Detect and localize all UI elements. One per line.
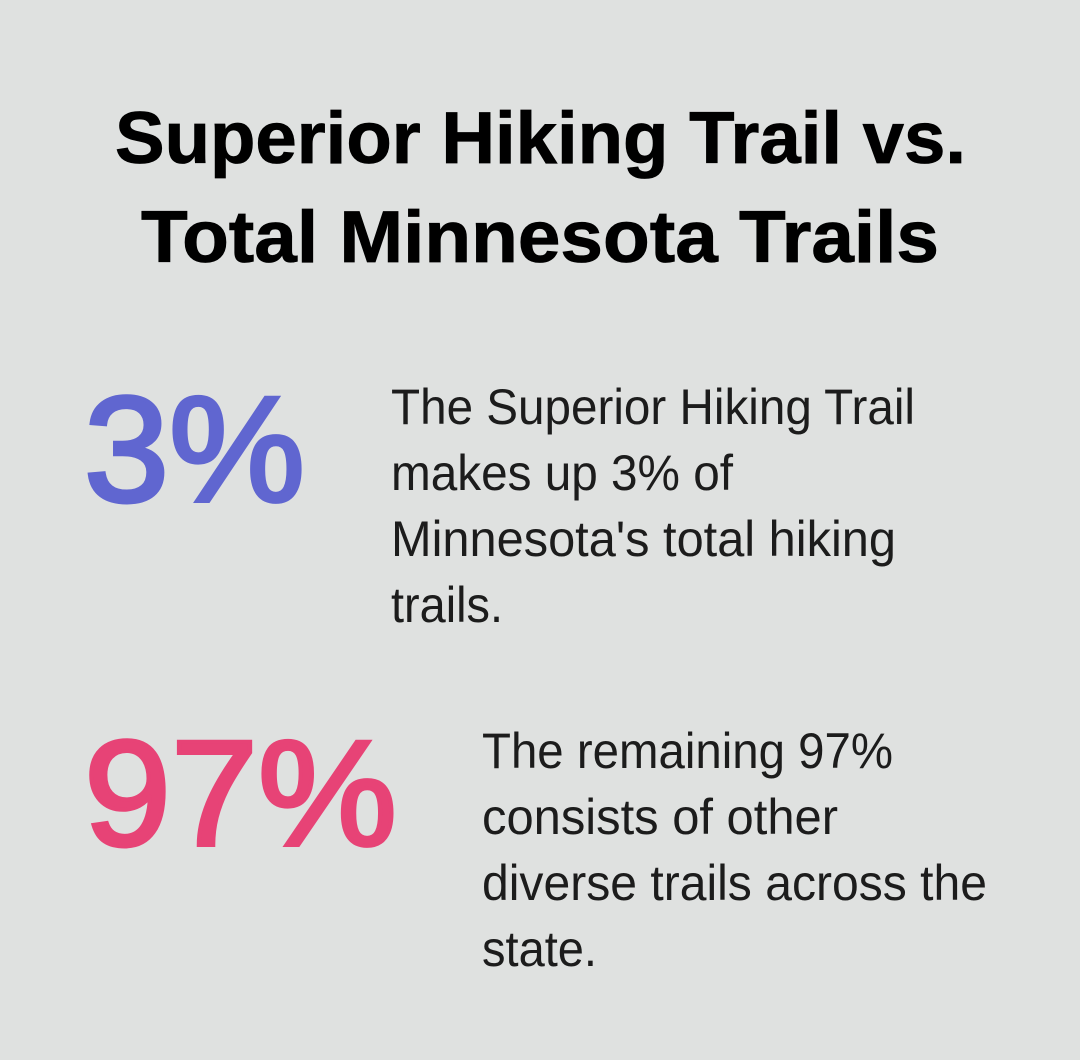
title: Total Minnesota Trails [141,197,939,278]
description: 97% share [482,723,987,977]
description: 3% share: trails. [391,577,503,633]
title [115,98,966,278]
description: 3% share: makes up 3% of [391,445,733,501]
description: 97% share: consists of other [482,789,838,845]
description: 3% share [391,379,915,633]
stat: 97%: 97% [84,709,397,877]
stat: 3%: 3% [84,365,305,533]
title: Superior Hiking Trail vs. [115,98,966,179]
description: 97% share: The remaining 97% [482,723,893,779]
description: 3% share: Minnesota's total hiking [391,511,896,567]
description: 97% share: diverse trails across the [482,855,987,911]
description: 97% share: state. [482,921,597,977]
description: 3% share: The Superior Hiking Trail [391,379,915,435]
